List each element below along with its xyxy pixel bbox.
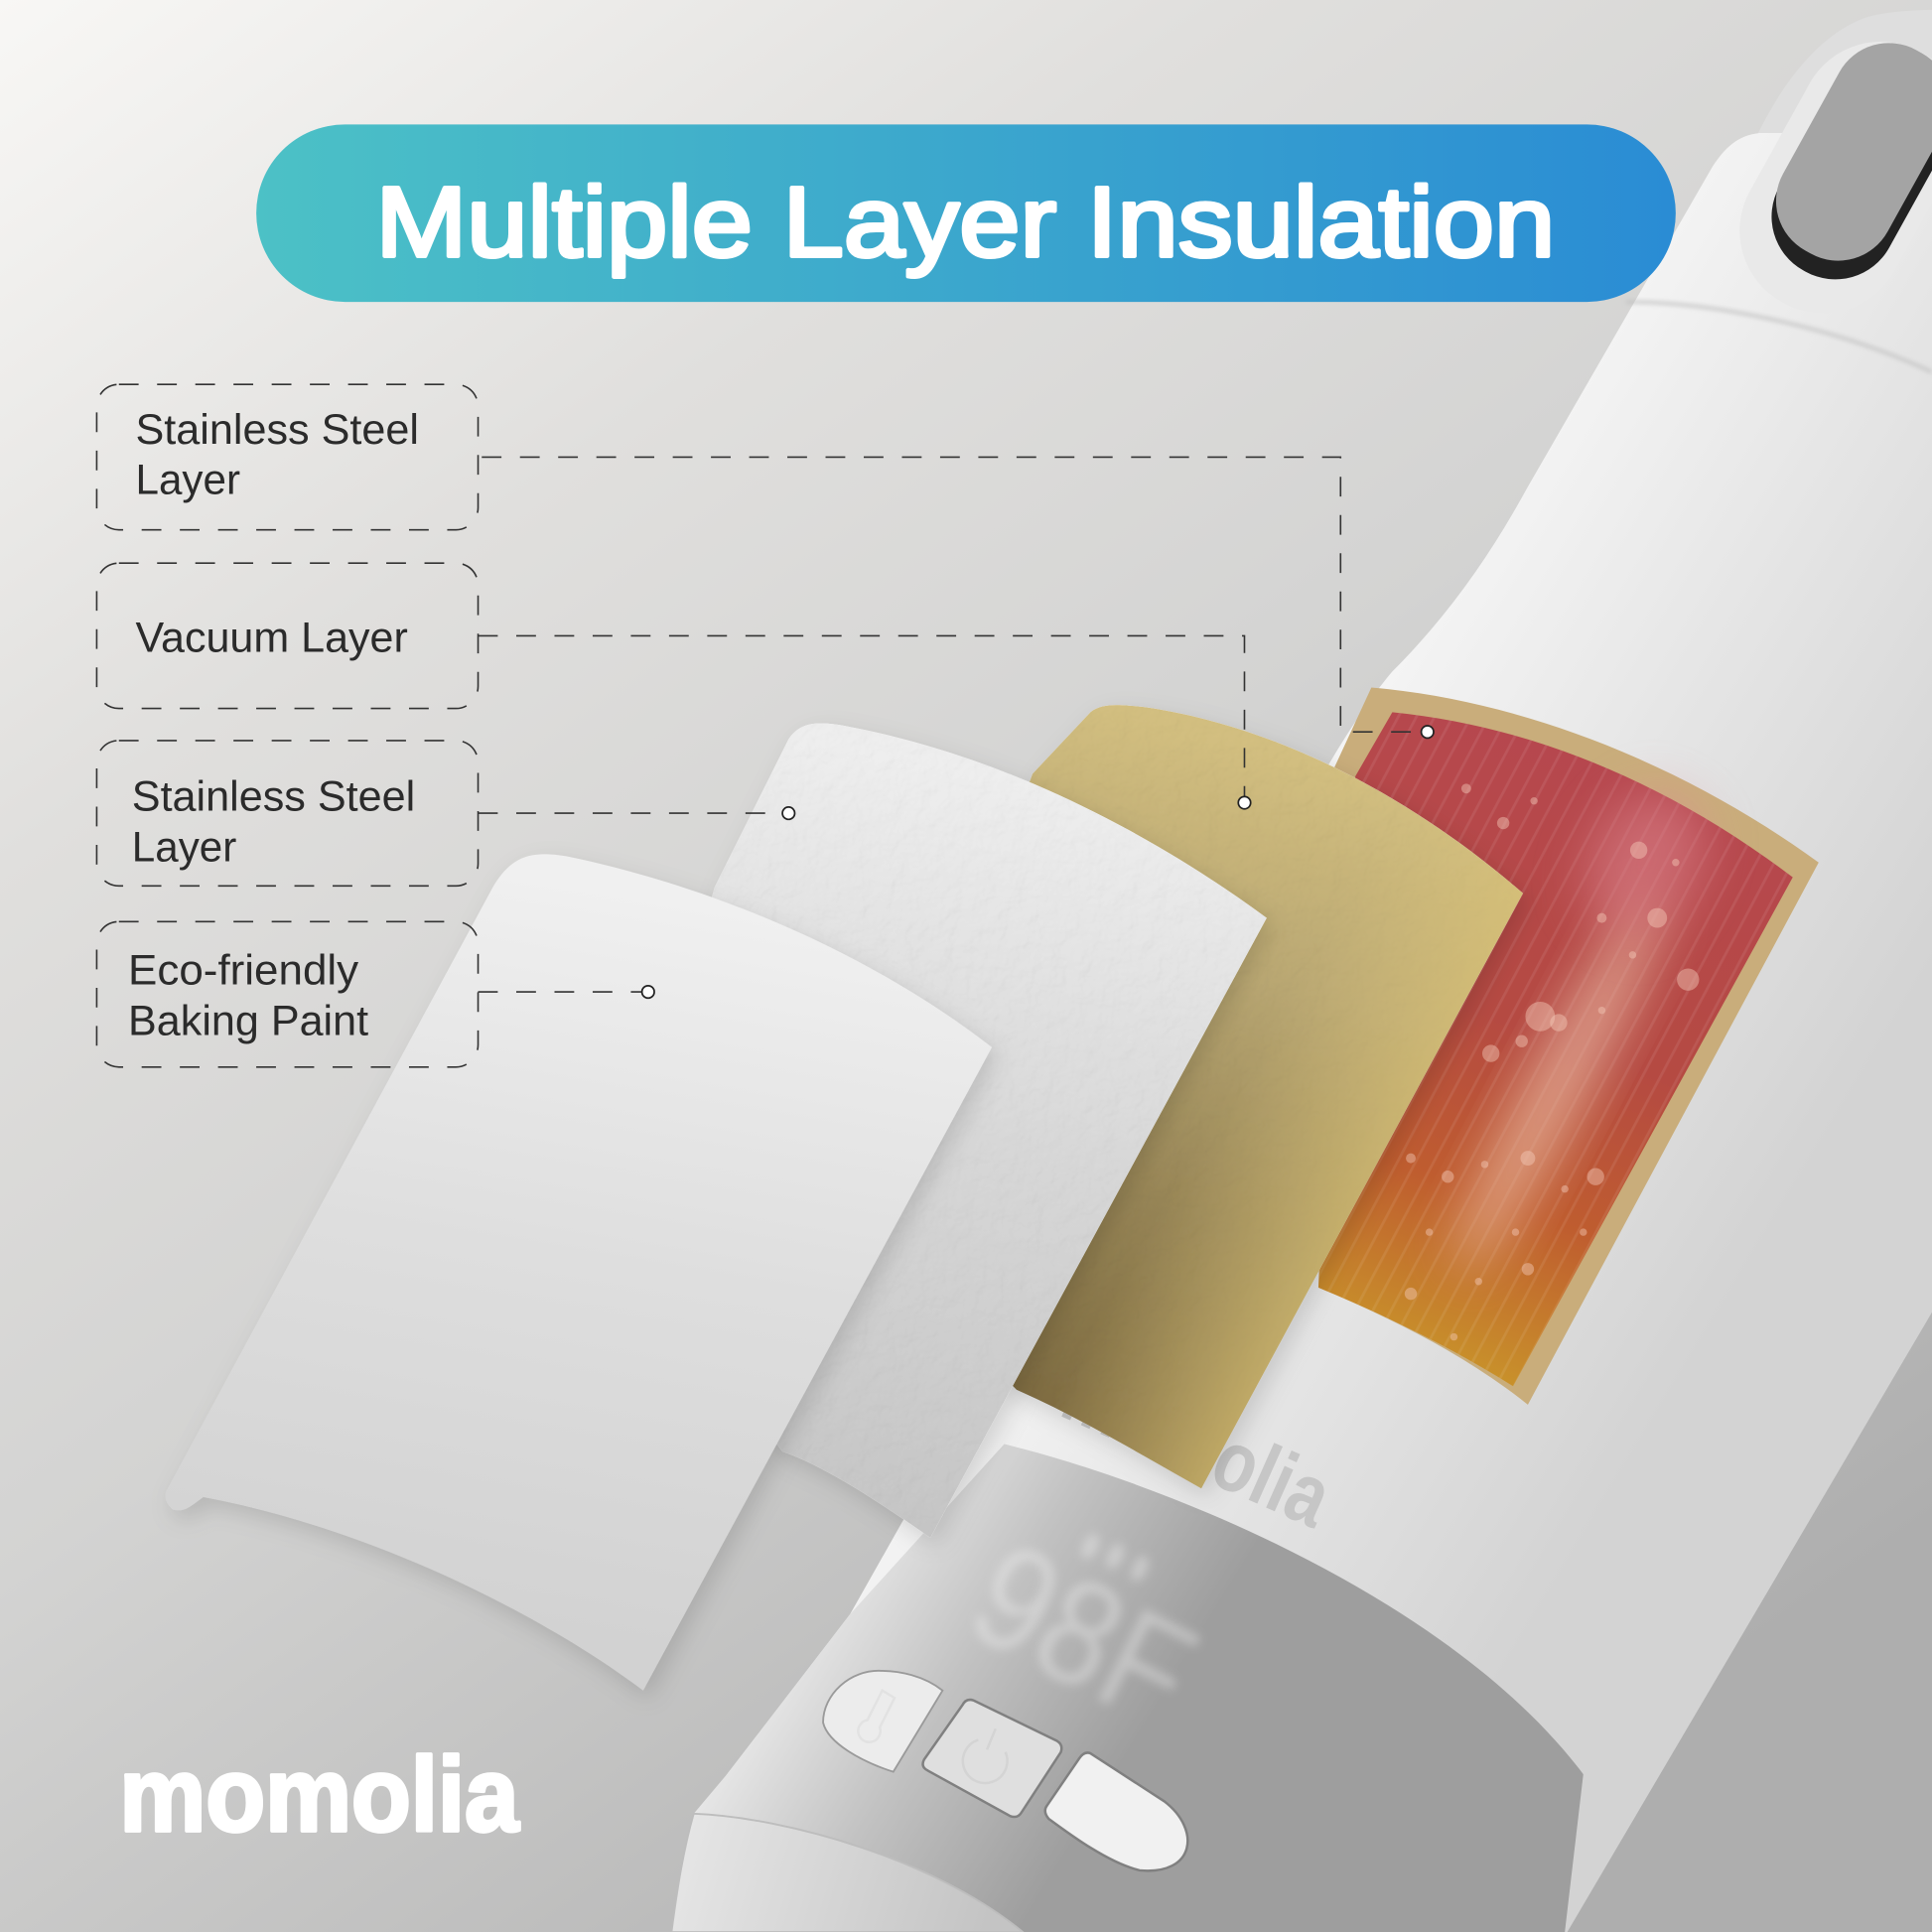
label: stainless steel layer (inner): Layer	[136, 457, 240, 503]
bubbles	[1405, 783, 1699, 1340]
label: stainless steel layer (inner)	[96, 384, 479, 530]
temperature display: 98F	[947, 1510, 1220, 1758]
button: temperature	[823, 1671, 942, 1772]
button: power	[923, 1700, 1061, 1817]
bottle	[671, 10, 1932, 1932]
upper glow	[1562, 771, 1728, 954]
label: vacuum layer	[96, 563, 479, 709]
title banner	[256, 124, 1676, 302]
button: timer	[1045, 1752, 1187, 1870]
leader: outer stainless steel	[479, 807, 794, 819]
water stripes	[1318, 712, 1793, 1386]
gold vacuum layer	[863, 705, 1523, 1488]
cap opening	[1711, 12, 1932, 343]
icon: power	[963, 1728, 1008, 1783]
leader: baking paint	[479, 986, 654, 998]
brand logo: momolia	[119, 1737, 520, 1854]
label: stainless steel layer (outer)	[96, 741, 479, 886]
label: eco-friendly baking paint: Eco-friendly	[128, 947, 359, 994]
label: stainless steel layer (outer): Layer	[132, 824, 236, 871]
stainless steel layer	[617, 724, 1267, 1538]
label: stainless steel layer (inner): Stainless Steel	[136, 406, 419, 453]
bottle body	[671, 133, 1932, 1932]
label: eco-friendly baking paint	[96, 921, 479, 1067]
control band	[694, 1445, 1584, 1932]
water glow	[1435, 886, 1683, 1283]
window frame	[1318, 688, 1819, 1405]
baking paint layer	[166, 854, 992, 1691]
bottle logo: momolia	[1049, 1343, 1346, 1546]
hot water	[1318, 712, 1793, 1386]
bottle cap	[1749, 10, 1932, 382]
inner tank window	[1318, 688, 1819, 1405]
lower body	[671, 1814, 1023, 1932]
title: Multiple Layer Insulation	[376, 167, 1555, 278]
neck seam	[1626, 302, 1932, 372]
label: eco-friendly baking paint: Baking Paint	[128, 997, 368, 1043]
icon: thermometer	[858, 1691, 895, 1742]
label: stainless steel layer (outer): Stainless Steel	[132, 773, 415, 820]
leader: inner stainless steel	[482, 457, 1434, 738]
leader: vacuum	[479, 635, 1251, 809]
label: vacuum layer: Vacuum Layer	[136, 615, 408, 661]
